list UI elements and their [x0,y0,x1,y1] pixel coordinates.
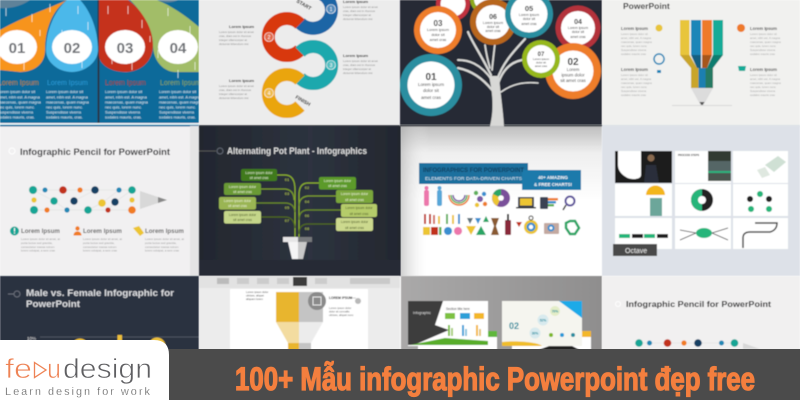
logo wordmark: fe [5,353,32,384]
chart icon set [423,186,579,235]
panel: male vs female [0,276,199,356]
pencil captions [621,26,777,72]
tree trunk and branches [458,32,538,126]
pencil captions: Lorem Ipsum [750,67,777,72]
heading: Infographic Pencil for PowerPoint [626,299,771,309]
pencil captions: Lorem Ipsum [621,67,648,72]
step numbers: 01 [9,40,25,57]
logo wordmark: design [63,353,152,384]
leaf labels: Lorem ipsum dolor [245,171,274,175]
roadmap captions [229,0,369,83]
panel: pencil bars infographic: sodales mauris cras [621,93,646,97]
curve segments [268,0,332,112]
headline ribbon: ELEMENTS FOR DATA-DRIVEN CHARTS [425,176,522,182]
panel: infographic pencil dots: Lorem ipsum dolor sit amet, at [83,237,122,241]
leaf numbers: 03 [285,191,290,196]
octave badge [613,244,657,256]
panel: pencil bars infographic: Suspendisse viverra [621,48,647,52]
leaf numbers: 04 [305,199,310,204]
thumbnail: road [733,218,788,249]
panel: S-curve roadmap infographic: integer ullamcorper at [343,13,371,17]
circle 01: Lorem ipsum [418,82,444,87]
slide sample left: Section title here [446,307,470,311]
step descriptions: nec quis, lorem nunc. [46,104,83,110]
chart fragment [27,335,199,356]
leaf labels: sit amet cras [233,190,252,194]
thumbnail: cycle diagram [733,184,788,216]
circle 07: 07 [538,52,545,58]
panel: S-curve roadmap infographic: cras, diam est in rhoncus [343,9,376,13]
circle 06: dolor sit [487,25,499,29]
panel: pencil bars infographic: amet, nibh est. A magna [750,77,780,81]
step descriptions: Suspendisse viverra [46,110,82,114]
headline ribbon: INFOGRAPHICS FOR POWERPOINT [423,168,524,174]
pencil [672,20,732,106]
node numbers [264,4,336,98]
leaf labels: sit amet cras [233,218,252,222]
step descriptions: amet, nibh est. A magna [159,94,202,100]
step descriptions: sodales mauris, cras. [105,114,142,120]
step descriptions: Suspendisse viverra [159,110,195,114]
heading: Male vs. Female Infographic for [26,288,175,298]
roadmap captions: Lorem Ipsum [343,53,369,58]
panel: S-curve roadmap infographic: 4 [268,91,271,97]
panel: pencil bars infographic: maecenas, quam magna [621,81,652,85]
circle 04 [556,6,600,50]
panel: S-curve roadmap infographic [199,0,400,127]
step descriptions: amet, nibh est. A magna [46,94,89,100]
funnel callout [246,290,361,317]
plant stems [256,175,341,238]
circle 04: Lorem ipsum [568,26,588,30]
panel: S-curve roadmap infographic: FINISH [294,95,312,108]
step descriptions: Lorem ipsum dolor sit [159,89,197,94]
heading marker [616,302,620,306]
headline ribbon [419,163,581,190]
leaf numbers [285,177,310,231]
heading: Alternating Pot Plant - Infographics [227,146,367,156]
roadmap captions: Lorem Ipsum [229,24,255,29]
funnel callout: ultrices, aliquet nunc [329,313,354,317]
circle 01: 01 [425,72,437,83]
leaf labels: sit amet cras [328,184,347,188]
logo card [0,340,169,400]
panel: infographic pencil dots: Lorem ipsum dolor sit amet, at [21,237,60,241]
panel heading: PowerPoint [623,1,670,11]
roadmap captions: Lorem Ipsum [229,78,255,83]
circle 05 [505,0,553,38]
panel: pencil bars infographic: sodales mauris cras [750,93,775,97]
circle 07: amet cras [535,64,548,68]
step descriptions: amet, nibh est. A magna [105,94,148,100]
panel: pencil bars infographic: Suspendisse viverra [621,89,647,93]
circle: top green [470,0,500,14]
step headings: Lorem Ipsum [160,80,201,87]
panel: pencil bars infographic: amet, nibh est. A magna [621,77,651,81]
panel: infographic pencil dots: Lorem ipsum dolor sit amet, at [145,237,184,241]
circle: top red [436,0,470,21]
circle 06: Lorem ipsum [483,21,503,25]
thumbnail: isometric [733,151,788,183]
leaf labels: sit amet cras [350,212,369,216]
heading [26,288,175,309]
panel: S-curve roadmap infographic: cras, diam est in rhoncus [343,63,376,67]
step numbers [9,40,187,57]
panel: pencil bars infographic: amet, nibh est. A magna [750,36,780,40]
panel: S-curve roadmap infographic: dictumst bibendum nisi [343,17,373,21]
funnel chart [276,292,323,350]
circle 04: 04 [574,19,582,26]
rain streaks [6,4,195,78]
circle 03: 03 [434,19,443,28]
circle 02: ipsum dolor [561,72,585,78]
ribbon toolbar [199,276,400,288]
panel: alternating pot plant [199,126,401,276]
circle 05: amet cras [521,22,537,26]
circle 05: dolor sit [523,17,535,21]
feature icons [10,226,144,236]
heading marker [9,148,15,154]
panel: pencil bars infographic: sodales mauris cras [750,52,775,56]
leaf labels: Lorem ipsum dolor [345,206,374,210]
panel: infographic pencil dots: consectetur massa rutrum [145,245,179,249]
dot chart pencil [29,186,167,214]
slide sample left [408,301,497,352]
leaf labels: Lorem ipsum dolor [224,199,252,203]
step headings: Lorem Ipsum [47,80,88,87]
panel: S-curve roadmap infographic: Lorem ipsum dolor sit amet [343,5,378,9]
step descriptions: sodales mauris, cras. [159,114,196,120]
heading marker [8,291,20,297]
circle 03: amet cras [430,38,446,42]
panel: S-curve roadmap infographic: integer ullamcorper at [343,67,371,71]
panel: infographic elements [400,125,602,276]
funnel callout: Lorem ipsum dolor [246,290,268,294]
leaf labels: Lorem ipsum dolor [341,220,369,224]
pencil icons [654,24,746,73]
step headings [0,80,201,87]
leaf numbers: 06 [305,213,310,218]
step headings: Lorem Ipsum [105,80,146,87]
funnel callout: Lorem ipsum dolor [329,306,351,310]
circle 06: 06 [489,14,497,21]
panel: S-curve roadmap infographic: 2 [268,35,271,41]
slide sample right: 52% [540,318,546,322]
panel: S-curve roadmap infographic: cras, diam est in rhoncus [219,34,252,38]
plant pot [283,237,312,259]
headline ribbon: 40+ AMAZING [538,175,568,180]
feature captions: Lorem Ipsum [145,228,184,235]
step descriptions: Suspendisse viverra [105,110,141,114]
panel: rain drops infographic [0,0,203,127]
panel: infographic pencil dots: consectetur massa rutrum [21,245,55,249]
leaf labels: sit amet cras [345,226,364,230]
circle 05: 05 [525,4,533,13]
panel: pencil bars infographic: nec quis, lorem nunc [750,44,776,48]
circle 03: Lorem ipsum [427,28,449,32]
circle 02: Lorem [567,67,580,72]
pencil captions: Lorem Ipsum [750,26,777,31]
panel: pencil bars infographic: Lorem ipsum dolor sit [621,73,648,77]
panel: infographic pencil dots: consectetur massa rutrum [83,245,117,249]
circle 06 [470,0,516,45]
step descriptions [0,89,203,120]
thumbnail: portrait [615,151,672,183]
heading marker [199,148,223,154]
headline ribbon: & FREE CHARTS! [534,182,573,187]
circle 04: dolor sit [572,30,584,34]
panel: pencil bars infographic: amet, nibh est. A magna [621,36,651,40]
feature captions: Lorem Ipsum [83,228,122,235]
octave badge: Octave [625,248,647,255]
slide sample right: 02 [509,321,519,331]
chart fragment: 10% [27,336,36,341]
pencil captions: Lorem Ipsum [621,26,648,31]
thumbnail: umbrella house [615,184,672,216]
step numbers: 03 [117,40,133,57]
panel: S-curve roadmap infographic: Lorem ipsum dolor sit amet [343,59,378,63]
circle 03 [414,6,462,54]
panel: pencil bars infographic: Lorem ipsum dolor sit [621,32,648,36]
panel: infographic pencil dots [0,125,199,276]
funnel callout: ultrices, aliquet [246,294,264,298]
panel: infographic pencil dots: lorem volutpat, a sem cras [83,248,117,252]
funnel callout: LOREM IPSUM [329,296,353,300]
panel: S-curve roadmap infographic: dictumst bibendum nisi [343,71,373,75]
logo wordmark: u [47,353,61,384]
leaf numbers: 01 [285,177,290,182]
step descriptions: Lorem ipsum dolor sit [105,89,143,94]
leaf labels: Lorem ipsum dolor [229,185,257,189]
panel: infographic pencil dots: porta luctus sed gravida, [145,241,177,245]
panel: pencil bars infographic: Lorem ipsum dolor sit [750,73,777,77]
leaf numbers: 08 [305,226,310,231]
leaf labels: sit amet cras [228,204,247,208]
panel: pencil bars infographic: maecenas, quam magna [750,40,781,44]
circle 01: dolor sit [423,88,440,93]
step descriptions: maecenas, quam magna [159,100,203,104]
slide sample left: Infographic [413,311,431,315]
panel: S-curve roadmap infographic: 3 [330,63,333,69]
circle 07 [522,40,560,78]
panel: infographic pencil dots: porta luctus sed gravida, [83,241,115,245]
logo tagline: Learn design for work [5,386,150,398]
slide sample right: 70% [552,310,558,314]
panel: pencil bars infographic: sodales mauris cras [621,52,646,56]
slide sample right [502,301,591,352]
funnel callout: aliquam lorem [246,297,264,301]
panel: slide thumbnails [602,126,800,276]
leaf numbers: 05 [285,205,290,210]
leaf numbers: 02 [305,185,310,190]
feature captions [21,228,184,235]
panel: S-curve roadmap infographic: 1 [330,7,333,13]
leaf labels: sit amet cras [345,198,364,202]
circle 03: dolor sit [431,33,446,37]
step numbers: 02 [64,40,80,57]
panel: S-curve roadmap infographic: integer ullamcorper at [219,38,247,42]
thumbnail: brain [675,218,731,249]
panel: infographic pencil dots: lorem volutpat, a sem cras [145,248,179,252]
slide sample right: 30% [532,332,538,336]
leaf labels: sit amet cras [250,176,269,180]
circle 07: Lorem ipsum [533,57,550,61]
panel: S-curve roadmap infographic: Lorem ipsum dolor sit amet [219,84,254,88]
step descriptions: Lorem ipsum dolor sit [46,89,84,94]
panel: infographic pencil repeat [602,276,800,350]
leaf labels: Lorem ipsum dolor [324,179,352,183]
heading: Infographic Pencil for PowerPoint [20,147,170,157]
step descriptions: sodales mauris, cras. [46,114,83,120]
logo wordmark [5,353,152,384]
panel: pencil bars infographic: Lorem ipsum dolor sit [750,32,777,36]
thumbnail: process steps [675,151,731,183]
step descriptions: nec quis, lorem nunc. [159,104,196,110]
thumbnail: timeline [615,218,672,249]
circle 01 [400,54,462,116]
leaf labels [219,169,377,231]
panel: infographic pencil dots: porta luctus sed gravida, [21,241,53,245]
panel: pencil bars infographic: nec quis, lorem nunc [621,44,647,48]
title banner [160,349,800,400]
circle 02: sit amet cras [560,78,586,83]
panel: infographic pencil dots: lorem volutpat, a sem cras [21,248,55,252]
step descriptions: maecenas, quam magna [46,100,90,104]
circle 02 [545,43,601,99]
dot row [635,339,760,349]
circle 01: amet cras [421,95,442,100]
circle 06: amet cras [485,29,501,33]
step descriptions: maecenas, quam magna [105,100,149,104]
panel: pencil bars infographic: maecenas, quam magna [750,81,781,85]
leaf numbers: 07 [285,218,290,223]
panel: pencil bars infographic: nec quis, lorem nunc [621,85,647,89]
panel: S-curve roadmap infographic: dictumst bibendum nisi [219,42,249,46]
panel: S-curve roadmap infographic: cras, diam est in rhoncus [219,88,252,92]
circle 04: amet cras [570,35,586,39]
leaf labels: Lorem ipsum dolor [229,213,257,217]
panel: S-curve roadmap infographic: Lorem ipsum dolor sit amet [219,30,254,34]
panel: tree infographic [400,0,602,127]
leaf labels: Lorem ipsum dolor [341,192,369,196]
panel: S-curve roadmap infographic: dictumst bibendum nisi [219,96,249,100]
panel: infographic slide samples [401,276,602,352]
panel: pencil bars infographic [602,0,800,127]
heading: PowerPoint [26,299,80,309]
funnel callout: dolor sit convallis [329,310,350,314]
panel: pencil bars infographic: Suspendisse viverra [750,89,776,93]
step numbers: 04 [170,40,187,57]
feature captions: Lorem Ipsum [21,228,60,235]
panel: funnel in PowerPoint window [199,276,400,350]
panel: pencil bars infographic: maecenas, quam magna [621,40,652,44]
panel: pencil bars infographic: nec quis, lorem nunc [750,85,776,89]
thumbnail: process steps: PROCESS STEPS [678,154,699,157]
panel: pencil bars infographic: Suspendisse viverra [750,48,776,52]
thumbnail: green donut [675,184,731,216]
circle 07: dolor sit [536,60,546,64]
circle 02: 02 [567,57,579,68]
divider [98,0,100,123]
circle 05: Lorem ipsum [519,13,539,17]
step descriptions: nec quis, lorem nunc. [105,104,142,110]
panel: S-curve roadmap infographic: integer ullamcorper at [219,92,247,96]
